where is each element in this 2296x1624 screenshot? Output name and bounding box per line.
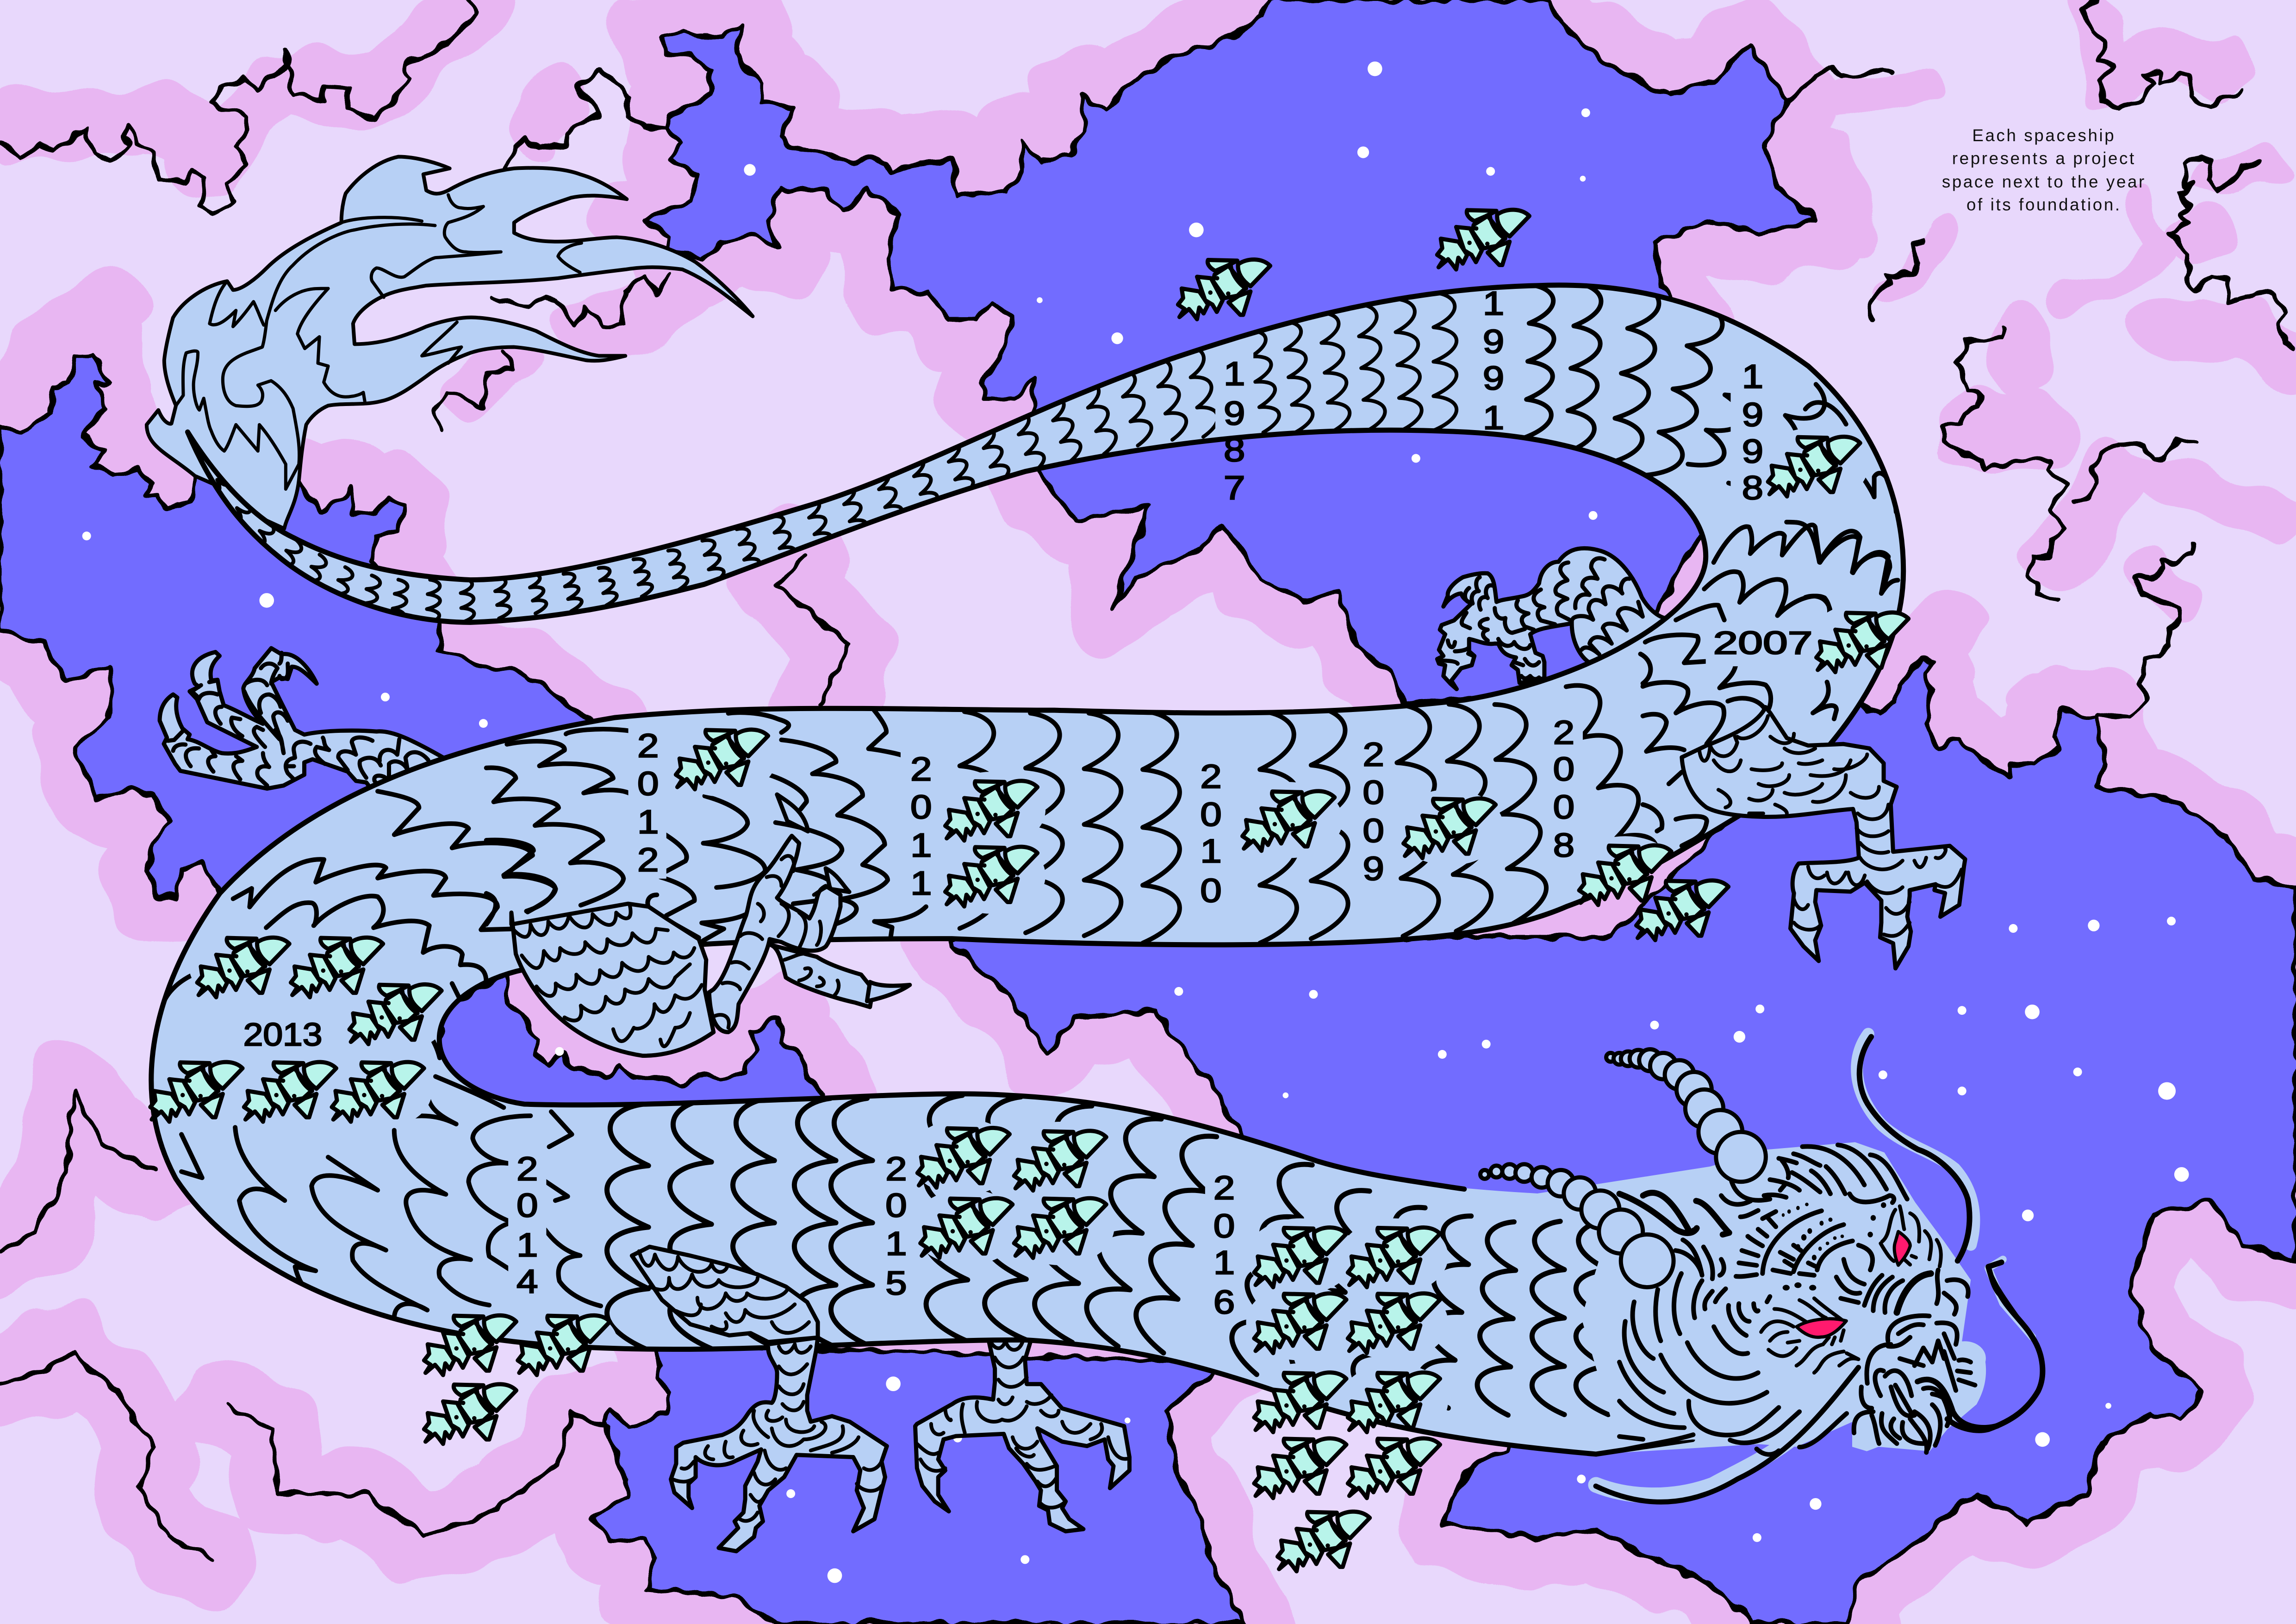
year 1987: 8 — [1224, 431, 1245, 468]
year 2016: 2 — [1213, 1169, 1235, 1206]
dragon tail fin — [147, 156, 753, 529]
scale rows: left bend — [159, 791, 601, 1331]
spaceship 2016 g — [1254, 1438, 1346, 1498]
year 2011: 2 — [910, 750, 932, 788]
spaceship 2011 b — [945, 847, 1038, 906]
year 2015: 5 — [885, 1264, 907, 1302]
scales: all body scale lines clipped to the dragon — [142, 283, 1916, 1439]
year 2012: 0 — [637, 765, 659, 802]
year 2016: 6 — [1213, 1283, 1235, 1321]
spaceship 2014 a — [424, 1315, 516, 1375]
scale rows: right bend upper — [1786, 402, 1896, 618]
spaceship 2014 c — [424, 1384, 516, 1444]
year labels — [243, 284, 1813, 1321]
spaceship 2009 — [1403, 799, 1496, 858]
spaceship 2015 b — [1014, 1131, 1106, 1191]
whisker shadows — [1596, 1034, 2032, 1495]
year 2014: 1 — [516, 1226, 538, 1264]
scale columns: lower body — [607, 1095, 1608, 1415]
leg: far left limb behind the body — [160, 648, 449, 793]
spaceship 2016 c — [1254, 1293, 1346, 1353]
spaceship 2014 b — [518, 1315, 610, 1375]
spaceship 2007 — [1817, 612, 1909, 672]
year 1991: 1 — [1483, 399, 1504, 437]
eye: lower — [1797, 1319, 1846, 1337]
year 2008: 2 — [1553, 713, 1574, 751]
year 2013: 2013 — [243, 1017, 322, 1053]
year 2007: 2007 — [1713, 625, 1813, 661]
year 1987: 1 — [1224, 355, 1245, 393]
spaceship 2015 d — [1014, 1198, 1106, 1258]
year 2008: 0 — [1553, 750, 1574, 788]
spaceship 2010 — [1243, 791, 1335, 851]
dragon body fill — [151, 285, 1962, 1454]
year 2008: 0 — [1553, 788, 1574, 826]
year 1991: 9 — [1483, 359, 1504, 397]
year 2011: 1 — [910, 864, 932, 902]
year 2014: 4 — [516, 1262, 538, 1300]
head linework — [1596, 1145, 1997, 1502]
spaceship 2015 a — [917, 1128, 1010, 1187]
body outline — [151, 285, 1904, 1454]
year 2015: 1 — [885, 1224, 907, 1262]
year 2011: 1 — [910, 826, 932, 864]
scale rows: right bend — [1641, 525, 1898, 846]
spaceship above 1987 — [1178, 260, 1270, 319]
spaceship 2016 i — [1277, 1512, 1370, 1571]
dragon head — [1481, 1034, 2042, 1502]
spaceship above 1991 — [1437, 210, 1530, 269]
year 1998: 8 — [1742, 469, 1763, 506]
spaceship 2016 f — [1348, 1373, 1440, 1432]
year 2016: 0 — [1213, 1207, 1235, 1245]
year 2014: 0 — [516, 1187, 538, 1224]
spaceship 2013 f — [332, 1062, 424, 1122]
leg: lower right foot behind the body — [915, 1337, 1129, 1531]
leg: lower left thigh and foot — [632, 1247, 887, 1551]
whiskers — [1860, 1037, 2042, 1430]
year 2008: 8 — [1553, 826, 1574, 864]
spaceship 2013 b — [291, 937, 383, 997]
eye: upper — [1894, 1231, 1910, 1265]
spaceship 2016 h — [1348, 1438, 1440, 1498]
explanatory note: Each spaceship — [1972, 126, 2116, 145]
year 2010: 0 — [1200, 872, 1222, 909]
explanatory note: space next to the year — [1942, 172, 2146, 191]
spaceship 2016 b — [1348, 1228, 1440, 1287]
year 1998: 1 — [1742, 357, 1763, 395]
year 2009: 9 — [1363, 849, 1384, 887]
year 2009: 0 — [1363, 774, 1384, 811]
year 2010: 1 — [1200, 832, 1222, 870]
year 1991: 1 — [1483, 284, 1504, 322]
year 2016: 1 — [1213, 1243, 1235, 1281]
spaceship 2011 a — [945, 781, 1038, 841]
year 2010: 0 — [1200, 795, 1222, 833]
head shape — [1581, 1142, 1986, 1451]
scale columns: middle body — [960, 676, 1667, 943]
spaceship 2016 a — [1254, 1228, 1346, 1287]
year 1987: 9 — [1224, 394, 1245, 432]
year 2014: 2 — [516, 1150, 538, 1187]
spaceship 2013 e — [244, 1062, 336, 1122]
horn: lower — [1481, 1164, 1674, 1287]
year 1991: 9 — [1483, 322, 1504, 360]
spaceship 2013 d — [150, 1062, 243, 1122]
spaceship 2012 — [676, 730, 768, 789]
leg: upper right limb behind the body — [1437, 548, 1670, 689]
leg: centre thigh and limb — [511, 794, 910, 1056]
spaceship 2008 b — [1636, 881, 1729, 940]
spaceship 2013 a — [197, 937, 289, 997]
spaceship 2016 d — [1348, 1293, 1440, 1353]
year 2012: 2 — [637, 841, 659, 879]
year 1998: 9 — [1742, 432, 1763, 470]
year 2015: 0 — [885, 1187, 907, 1224]
scale columns: upper body and bend — [1524, 288, 1827, 486]
horn: long upper — [1606, 1049, 1766, 1182]
explanatory note: represents a project — [1952, 149, 2136, 168]
spaceship 2016 e — [1254, 1373, 1346, 1432]
year 2015: 2 — [885, 1150, 907, 1187]
scale columns: tail — [197, 293, 1456, 625]
year 2009: 0 — [1363, 812, 1384, 849]
leg: right limb and foot in front of the body — [1682, 707, 1965, 968]
spaceship 2013 c — [349, 984, 442, 1044]
spaceship 2008 a — [1579, 845, 1671, 905]
year 2009: 2 — [1363, 735, 1384, 773]
year 2012: 1 — [637, 803, 659, 841]
year 2011: 0 — [910, 788, 932, 826]
explanatory note: of its foundation. — [1966, 195, 2122, 214]
spaceship 2015 c — [921, 1198, 1013, 1258]
spaceship 1998 — [1768, 437, 1860, 496]
spaceships — [150, 210, 1909, 1571]
year 1987: 7 — [1224, 469, 1245, 506]
year 2012: 2 — [637, 726, 659, 764]
scale rows: body near the centre leg — [486, 700, 926, 941]
year 1998: 9 — [1742, 396, 1763, 433]
clear halos around rockets and year labels — [142, 286, 1916, 1439]
year 2010: 2 — [1200, 757, 1222, 795]
